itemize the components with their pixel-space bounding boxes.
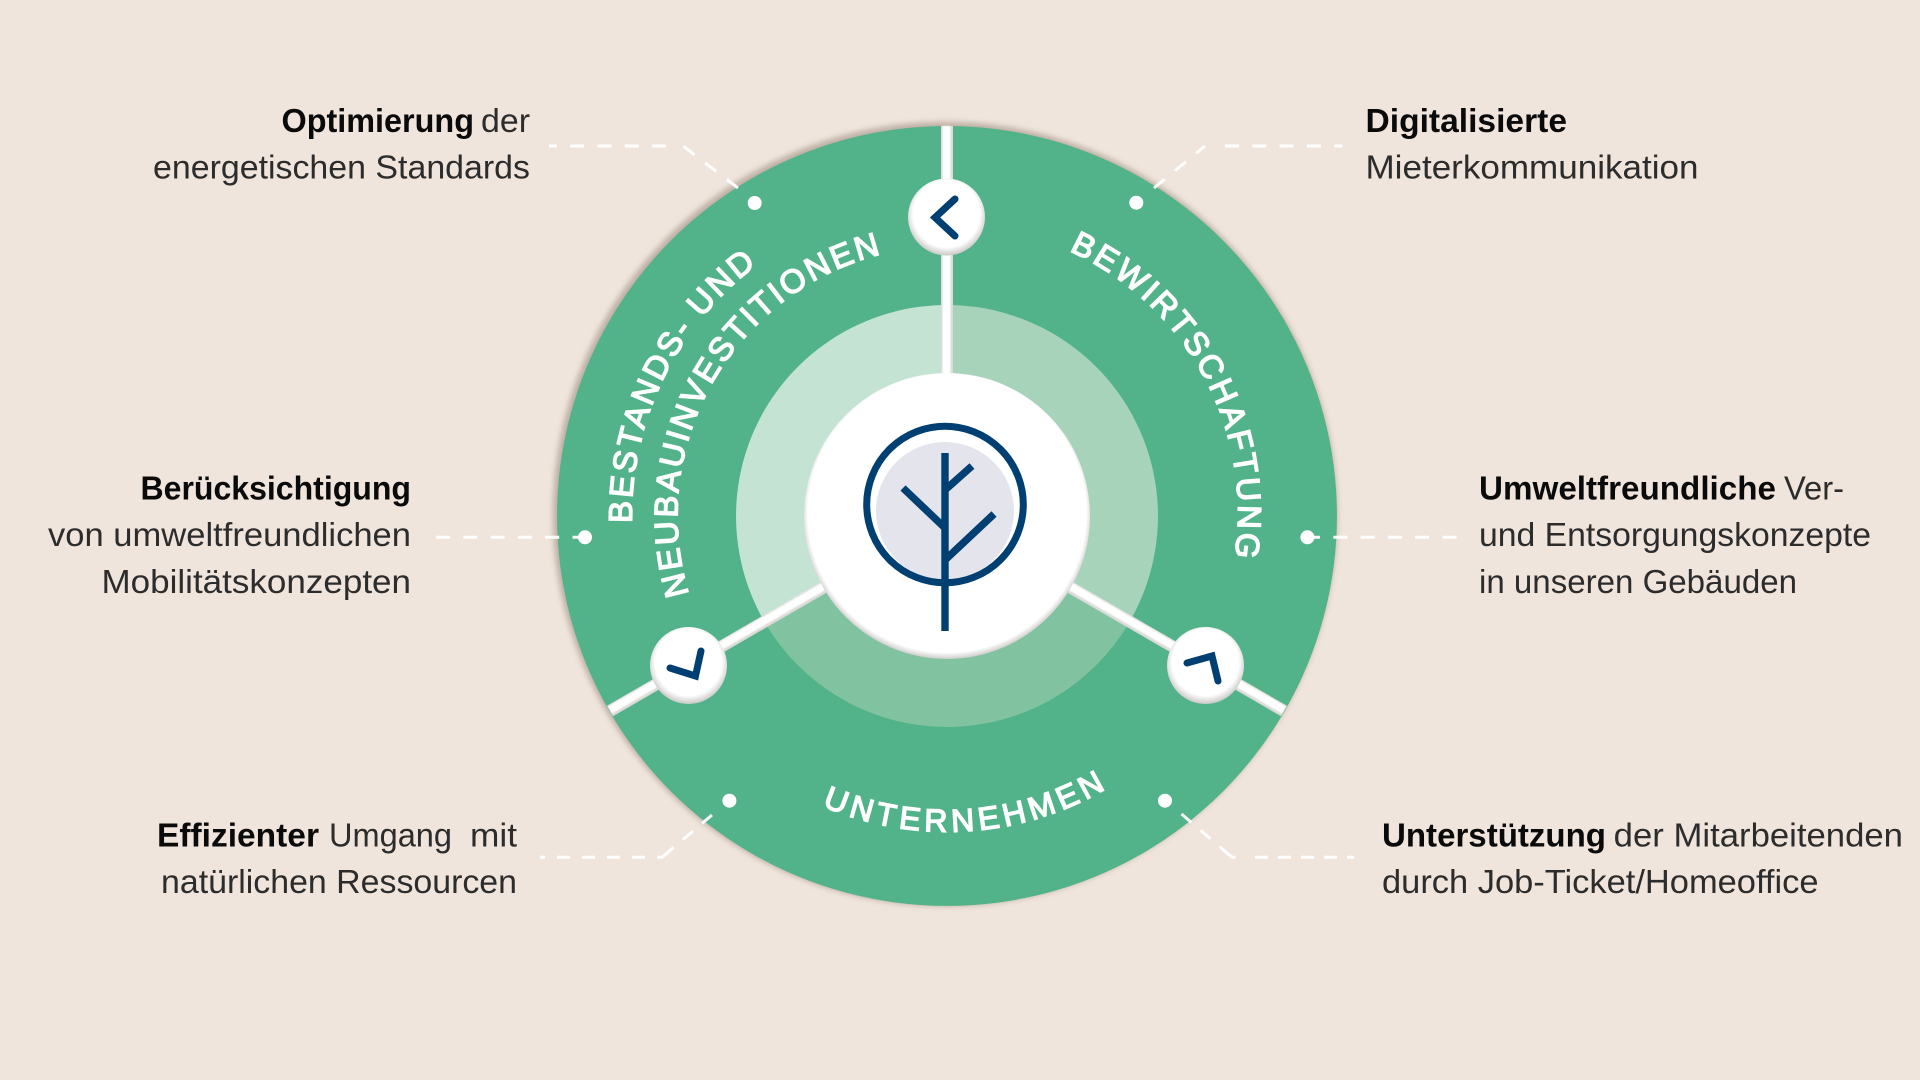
text: Effizienter Umgang mit natürlichen Ressourcen: natürlichen Ressourcen [161, 863, 517, 900]
text: Unterstützung der Mitarbeitenden durch Job-Ticket/Homeoffice: der Mitarbeitenden [1614, 816, 1903, 854]
text: Digitalisierte Mieterkommunikation: Digitalisierte [1366, 102, 1567, 139]
text: Berücksichtigung von umweltfreundlichen Mobilitätskonzepten: von umweltfreundlichen [48, 516, 411, 553]
connector: Umweltfreundliche [1300, 530, 1456, 544]
text: Umweltfreundliche Ver- und Entsorgungskonzepte in unseren Gebäuden: Umweltfreundliche [1479, 470, 1776, 506]
text: Effizienter Umgang mit natürlichen Ressourcen: mit [470, 816, 517, 854]
ring label: Bewirtschaftung: BEWIRTSCHAFTUNG [1070, 230, 1262, 558]
text: Unterstützung der Mitarbeitenden durch Job-Ticket/Homeoffice: durch Job-Ticket/Homeoffice [1382, 863, 1818, 900]
node: top arrow [908, 178, 985, 256]
text: Optimierung der energetischen Standards: der [481, 102, 530, 139]
icon: tree [867, 426, 1023, 631]
text: Umweltfreundliche Ver- und Entsorgungskonzepte in unseren Gebäuden: Ver- [1784, 470, 1844, 506]
center white disc [804, 373, 1090, 659]
text: Digitalisierte Mieterkommunikation [1366, 102, 1698, 186]
ring label: Bestands- und: BESTANDS- UND [608, 252, 752, 522]
text: Optimierung der energetischen Standards: Optimierung [282, 102, 474, 139]
text: Unterstützung der Mitarbeitenden durch Job-Ticket/Homeoffice [1382, 816, 1903, 900]
connector: Berücksichtigung [436, 530, 592, 544]
inner ring: left segment [736, 305, 947, 622]
connector: Digitalisierte [1129, 146, 1342, 210]
connector: Unterstützung [1158, 794, 1354, 857]
node: lower right arrow [1167, 627, 1244, 704]
text: Umweltfreundliche Ver- und Entsorgungskonzepte in unseren Gebäuden [1479, 470, 1871, 600]
text: Optimierung der energetischen Standards: energetischen Standards [153, 148, 530, 186]
divider: top [940, 126, 953, 380]
text: Umweltfreundliche Ver- und Entsorgungskonzepte in unseren Gebäuden: und Entsorgungskonzepte [1479, 516, 1871, 553]
ring label: Unternehmen: UNTERNEHMEN [826, 770, 1105, 833]
sector: Bewirtschaftung [947, 126, 1337, 711]
text: Unterstützung der Mitarbeitenden durch Job-Ticket/Homeoffice: Unterstützung [1382, 816, 1606, 854]
circular diagram [550, 119, 1340, 909]
text: Berücksichtigung von umweltfreundlichen Mobilitätskonzepten: Berücksichtigung [140, 470, 411, 506]
text: Berücksichtigung von umweltfreundlichen Mobilitätskonzepten [48, 470, 411, 600]
text: Digitalisierte Mieterkommunikation: Mieterkommunikation [1366, 148, 1698, 186]
sector: Bestands- und Neubauinvestitionen [557, 126, 947, 711]
connector: Effizienter [540, 794, 736, 857]
inner ring: right segment [947, 305, 1158, 622]
divider: lower left [610, 585, 826, 711]
divider: lower right [1068, 585, 1284, 711]
text: Berücksichtigung von umweltfreundlichen Mobilitätskonzepten: Mobilitätskonzepten [102, 563, 411, 600]
text: Effizienter Umgang mit natürlichen Ressourcen: Umgang [329, 816, 452, 854]
connector: Optimierung [549, 146, 762, 210]
ring label: Neubauinvestitionen: NEUBAUINVESTITIONEN [654, 232, 880, 598]
text: Umweltfreundliche Ver- und Entsorgungskonzepte in unseren Gebäuden: in unseren Gebäuden [1479, 563, 1797, 600]
outer ring shadow [553, 122, 1337, 906]
text: Effizienter Umgang mit natürlichen Ressourcen: Effizienter [157, 816, 319, 854]
sector: Unternehmen [609, 516, 1285, 906]
text: Optimierung der energetischen Standards [153, 102, 530, 186]
text: Effizienter Umgang mit natürlichen Ressourcen [157, 816, 517, 900]
inner ring: bottom segment [764, 516, 1130, 727]
node: lower left arrow [650, 627, 727, 704]
